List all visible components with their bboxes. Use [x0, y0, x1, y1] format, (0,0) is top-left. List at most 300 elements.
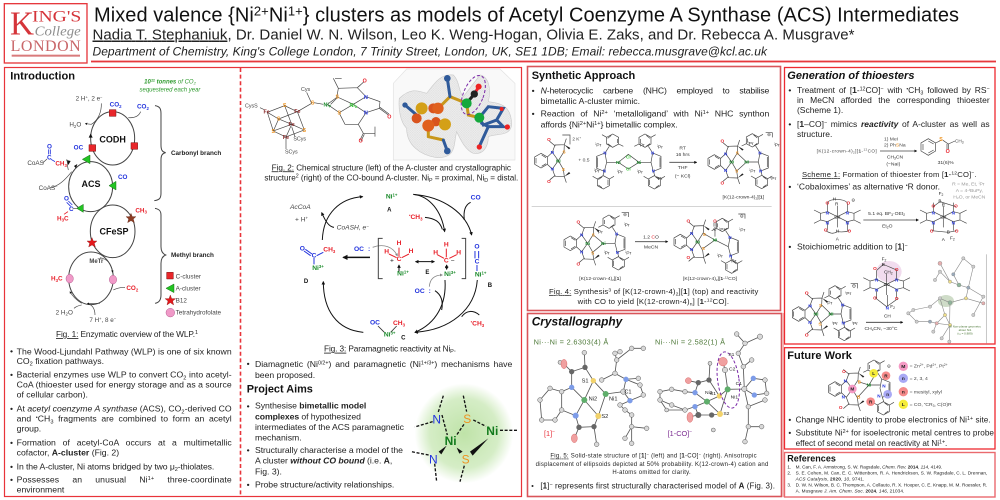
text block: introduction bullets: environment: [17, 485, 65, 495]
figure 3: paramagnetic reactivity cycle: +: [306, 216, 309, 221]
title: Mixed valence {Ni: [94, 5, 254, 27]
figure 1: enzymatic overview of the WLP: tonnes: [155, 79, 177, 85]
figure 3: paramagnetic reactivity cycle: CH: [472, 321, 482, 328]
figure 3: paramagnetic reactivity cycle: H: [433, 249, 438, 256]
text block: thioester bullets: with: [883, 85, 906, 95]
figure 1: enzymatic overview of the WLP: CFeSP: [100, 226, 128, 236]
text block: introduction bullets: [10, 346, 232, 495]
figure 4: synthesis scheme of complex 1: O: [577, 220, 581, 225]
text block: future work bullets: •: [788, 429, 791, 438]
caption: figure 4: 12: [707, 297, 713, 303]
figure: stoichiometric addition with crystal structure: N: [841, 302, 845, 308]
scheme: cobaloxime BF2 conversion: Et: [882, 224, 887, 230]
figure 2: A-cluster chemical structure: SCys: [285, 149, 298, 155]
text block: thioester bullets: •: [788, 85, 791, 95]
figure: stoichiometric addition with crystal structure: O: [873, 295, 877, 300]
caption: scheme 1: .: [975, 170, 977, 179]
text block: reference list: 3.: [787, 483, 791, 488]
caption: figure 2: = distal.: [488, 173, 518, 182]
figure: future work ligand design: Ni: [867, 383, 871, 388]
scheme: cobaloxime BF2 conversion: N: [952, 220, 956, 225]
panel: references: [784, 452, 995, 497]
figure: future work ligand design: L: [872, 371, 875, 376]
figure 5: solid-state crystal structures: Ni···Ni = 2.6303(4) Å: [534, 338, 608, 347]
heading: Crystallography: Crystallography: [532, 314, 624, 328]
title: 1+: [288, 4, 303, 19]
scheme: cobaloxime BF2 conversion: O: [932, 204, 936, 209]
figure: future work ligand design: [829, 360, 952, 415]
figure 1: enzymatic overview of the WLP: C: [64, 215, 69, 222]
scheme 1: thioester formation: 1) MeI: [884, 136, 898, 142]
scheme: cobaloxime BF2 conversion: O: [930, 228, 934, 233]
figure 3: paramagnetic reactivity cycle: C: [475, 258, 480, 265]
figure 4: synthesis scheme of complex 1: ⁱPr: [770, 175, 777, 182]
text block: thioester bullets: 3: [920, 91, 923, 97]
figure 5: solid-state crystal structures: S2: [601, 414, 608, 420]
text block: project aims bullets: Structurally characterise a model of the: [255, 445, 403, 455]
figure 4: synthesis scheme of complex 1: 16 hrs: [676, 152, 690, 158]
figure: stoichiometric addition with crystal structure: ⊖: [852, 284, 856, 290]
scheme 1: thioester formation: 31(6)%: [938, 160, 954, 166]
figure 2: A-cluster chemical structure: N: [364, 95, 368, 101]
text block: introduction bullets: •: [10, 475, 13, 485]
figure 1: enzymatic overview of the WLP: −: [114, 316, 117, 321]
figure 3: paramagnetic reactivity cycle: 3: [482, 323, 485, 328]
figure: future work ligand design: B: [858, 380, 862, 385]
scheme 1: thioester formation: 1-: [859, 148, 863, 153]
text block: mechanism note: Diamagnetic (Ni: [255, 359, 318, 369]
scheme 1: thioester formation: CH: [955, 139, 962, 144]
text block: introduction bullets: of cellular carbon).: [17, 390, 88, 400]
caption: scheme 1: 12: [951, 170, 957, 176]
figure 3: paramagnetic reactivity cycle: OC: [370, 319, 380, 326]
text block: introduction bullets: and: [17, 414, 31, 424]
figure: future work ligand design: R: [884, 373, 888, 378]
text block: introduction bullets: 2: [30, 362, 33, 368]
figure 5: solid-state crystal structures: Ni2: [589, 396, 597, 402]
panel: synthetic approach: [528, 66, 780, 310]
figure 4: synthesis scheme of complex 1: 2: [612, 278, 614, 282]
scheme: cobaloxime BF2 conversion: 3: [891, 213, 893, 217]
scheme: cobaloxime BF2 conversion: O: [824, 228, 828, 233]
text block: crystallography bullet: A (Fig. 3).: [739, 482, 775, 491]
text block: introduction bullets: -derived CO: [185, 404, 232, 414]
figure: future work ligand design: O: [839, 405, 843, 410]
text block: thioester bullets: [788, 85, 990, 139]
figure 3: paramagnetic reactivity cycle: Ni: [384, 332, 391, 339]
text block: thioester bullets: CH: [908, 85, 920, 95]
figure 1: enzymatic overview of the WLP: O: [76, 122, 81, 129]
figure 3: paramagnetic reactivity cycle: + H: [295, 217, 306, 224]
text block: introduction bullets: group.: [17, 424, 41, 434]
figure 4: synthesis scheme of complex 1: ⁱPr: [595, 141, 602, 148]
scheme: cobaloxime BF2 conversion: F: [950, 235, 953, 240]
figure 1: enzymatic overview of the WLP: CH: [135, 207, 144, 214]
figure 2: A-cluster chemical structure: O: [387, 114, 391, 120]
figure: future work ligand design: L: [902, 402, 905, 408]
figure: stoichiometric addition with crystal structure: N: [895, 288, 899, 293]
caption: figure 5: −: [647, 452, 650, 457]
scheme: cobaloxime BF2 conversion: N: [826, 220, 830, 225]
header: King's College London logo: LONDON: [11, 38, 81, 55]
figure 5: solid-state crystal structures: [534, 332, 769, 447]
figure 3: paramagnetic reactivity cycle: CoASH, e: [337, 224, 366, 231]
figure: stoichiometric addition with crystal structure: O: [895, 267, 899, 272]
caption: scheme 1: CO]: [957, 170, 971, 179]
figure: future work ligand design: ⊖: [887, 364, 891, 369]
figure: future work ligand design: n: [886, 392, 889, 397]
figure: future work ligand design: R: [869, 399, 873, 404]
figure: future work ligand design: , C(O)R: [934, 402, 952, 408]
text block: introduction bullets: CO: [17, 356, 30, 366]
figure 4: synthesis scheme of complex 1: O: [721, 138, 725, 143]
figure 3: paramagnetic reactivity cycle: OC:: [415, 288, 431, 295]
caption: figure 5: displacement of ellipsoids depicted at 50% probability. K(12-crown-4) cation and: [536, 462, 768, 468]
scheme 1: thioester formation: [K(12-crown-4): [817, 148, 853, 153]
figure 1: enzymatic overview of the WLP: 2: [74, 124, 77, 129]
figure 3: paramagnetic reactivity cycle: 3+: [319, 264, 324, 269]
heading: References: References: [787, 454, 836, 464]
figure 4: synthesis scheme of complex 1: N: [759, 169, 762, 174]
figure: stoichiometric addition with crystal structure: ⁱPr: [845, 290, 852, 297]
figure: stoichiometric addition with crystal structure: O: [873, 266, 877, 271]
text block: cobaloxime bullet: •: [788, 182, 791, 192]
figure 4: synthesis scheme of complex 1: N: [551, 167, 555, 172]
figure 2: A-cluster chemical structure: Ni: [349, 103, 355, 109]
figure 4: synthesis scheme of complex 1: +: [579, 136, 581, 140]
figure 3: paramagnetic reactivity cycle: 3: [403, 322, 406, 327]
figure: future work ligand design: = Zn: [910, 364, 920, 370]
figure 1: enzymatic overview of the WLP: 11: [151, 77, 155, 82]
figure 5: solid-state crystal structures: Ni2: [705, 390, 713, 396]
caption: figure 4: ] [: [693, 297, 700, 306]
figure 1: enzymatic overview of the WLP: 2: [66, 312, 69, 317]
text block: synthetic approach bullets: [532, 86, 769, 130]
text block: future work bullets: [788, 416, 994, 448]
figure 4: synthesis scheme of complex 1: O: [547, 179, 551, 184]
figure 5: solid-state crystal structures: [1-CO]: [668, 429, 689, 438]
text block: introduction bullets: 2: [175, 467, 178, 473]
figure: stoichiometric addition with crystal structure: SI Non-planar geometry: [949, 325, 981, 329]
figure 3: paramagnetic reactivity cycle: •: [471, 320, 473, 325]
figure 5: solid-state crystal structures: Ni1: [731, 394, 738, 400]
scheme: cobaloxime BF2 conversion: B: [938, 198, 942, 203]
figure 3: paramagnetic reactivity cycle: Ni: [397, 270, 404, 277]
figure 4: synthesis scheme of complex 1: ⁱPr: [639, 141, 645, 148]
figure 2: A-cluster chemical structure: S: [311, 100, 315, 106]
figure 1: enzymatic overview of the WLP: CO: [126, 285, 136, 292]
figure: future work ligand design: N: [877, 393, 881, 398]
scheme: cobaloxime BF2 conversion: O: [955, 228, 959, 233]
caption: figure 5: (left) and [: [649, 454, 681, 460]
figure 1: enzymatic overview of the WLP: CO: [118, 174, 128, 181]
figure 3: paramagnetic reactivity cycle: H: [384, 248, 389, 255]
affiliation: Department of Chemistry, King's College London, 7 Trinity Street, London, UK, SE1 1DB; Email: rebecca.musgrave@kcl.ac.uk: [92, 44, 768, 58]
figure 1: enzymatic overview of the WLP: Tetrahydrofolate: [176, 309, 222, 316]
panel: future work: [784, 348, 995, 449]
figure 1: enzymatic overview of the WLP: +: [99, 316, 102, 321]
figure 3: paramagnetic reactivity cycle: O: [474, 243, 480, 250]
figure 1: enzymatic overview of the WLP: 3: [56, 278, 59, 283]
figure: stoichiometric addition with crystal structure: Co: [884, 282, 890, 287]
figure 3: paramagnetic reactivity cycle: 3+: [451, 270, 456, 275]
text block: introduction bullets: 3: [50, 419, 53, 425]
figure 4: synthesis scheme of complex 1: ⁱPr: [749, 167, 756, 174]
figure 1: enzymatic overview of the WLP: 2: [119, 104, 122, 109]
figure: stoichiometric addition with crystal structure: CH: [884, 269, 891, 274]
scheme 1: thioester formation: 2: [853, 150, 855, 154]
figure 3: paramagnetic reactivity cycle: E: [425, 270, 429, 276]
text block: stoichiometric addition bullet: •: [788, 242, 791, 252]
figure 4: synthesis scheme of complex 1: N: [615, 232, 618, 237]
text block: synthetic approach bullets: Ni: [586, 120, 594, 130]
text block: project aims bullets: A cluster without CO bound (i.e. A,: [255, 456, 392, 466]
caption: figure 2: Fig. 2: Chemical structure (left) of the A-cluster and crystallographic: [272, 163, 511, 172]
text block: introduction bullets: fixation pathways.: [33, 356, 104, 366]
scheme: cobaloxime BF2 conversion: Co: [940, 214, 947, 219]
figure 5: solid-state crystal structures: C2: [729, 367, 736, 373]
caption: figure 4: of [K(12-crown-4): [611, 287, 676, 296]
text block: future work bullets: •: [788, 416, 791, 425]
figure: stoichiometric addition with crystal structure: N: [808, 303, 812, 309]
scheme: cobaloxime BF2 conversion: H₂O, or MeCN: [953, 194, 986, 200]
figure 1: enzymatic overview of the WLP: +: [86, 94, 89, 99]
text block: crystallography bullet: −: [549, 482, 553, 488]
figure 4: synthesis scheme of complex 1: Ni: [729, 160, 734, 165]
figure 4: synthesis scheme of complex 1: S: [562, 149, 566, 154]
figure 1: enzymatic overview of the WLP: C: [47, 155, 52, 162]
caption: figure 5: H-atoms omitted for clarity.: [612, 470, 691, 476]
text block: future work bullets: 2+: [843, 429, 849, 435]
figure 2: A-cluster chemical structure: S: [277, 116, 281, 122]
figure 4: synthesis scheme of complex 1: CO]: [728, 276, 738, 282]
figure 3: paramagnetic reactivity cycle: H: [444, 241, 449, 248]
figure 4: synthesis scheme of complex 1: O: [721, 180, 725, 185]
text block: project aims bullets: Synthesise bimetallic model: [255, 401, 366, 411]
figure 1: enzymatic overview of the WLP: C: [58, 276, 63, 283]
figure: stoichiometric addition with crystal structure: Ni: [828, 312, 834, 318]
figure 1: enzymatic overview of the WLP: 2: [146, 106, 149, 111]
scheme: cobaloxime BF2 conversion: N: [952, 210, 956, 215]
scheme: cobaloxime BF2 conversion: N: [846, 210, 850, 215]
figure: future work ligand design: , Pt: [936, 364, 944, 370]
figure 4: synthesis scheme of complex 1: 12: [725, 276, 728, 280]
text block: project aims bullets: •: [247, 479, 250, 489]
figure: future work ligand design: = mesityl, xylyl: [910, 389, 942, 395]
figure 2: A-cluster chemical structure: S: [336, 94, 340, 100]
text block: project aims bullets: •: [247, 401, 250, 411]
figure 4: synthesis scheme of complex 1: ⁱPr: [657, 143, 663, 150]
figure: future work ligand design: n: [902, 389, 905, 395]
scheme: cobaloxime BF2 conversion: ⊖: [851, 198, 855, 203]
figure 4: synthesis scheme of complex 1: N: [690, 247, 694, 252]
text block: introduction bullets: Formation of acetyl-CoA occurs at a multimetallic: [17, 438, 232, 448]
figure 1: enzymatic overview of the WLP: 2: [193, 81, 197, 86]
figure 3: paramagnetic reactivity cycle: CH: [323, 247, 333, 254]
scheme: cobaloxime BF2 conversion: 2: [953, 237, 955, 241]
figure 2: A-cluster chemical structure: S: [272, 129, 276, 135]
figure: future work ligand design: = CO,: [910, 402, 923, 408]
caption: figure 2: 2: [296, 174, 299, 180]
illustration: bimetallic Ni2S2 model core: N: [429, 453, 438, 467]
figure 1: enzymatic overview of the WLP: sequestered each year: [140, 88, 201, 94]
figure 3: paramagnetic reactivity cycle: 3: [333, 249, 336, 254]
text block: cobaloxime bullet: ‘Cobaloximes’ as alternative: [797, 182, 903, 192]
figure 1: enzymatic overview of the WLP: CODH: [99, 134, 126, 144]
figure 4: synthesis scheme of complex 1: S: [591, 250, 594, 255]
figure: stoichiometric addition with crystal structure: 3: [872, 328, 874, 332]
figure: stoichiometric addition with crystal structure: N: [886, 305, 890, 310]
authors: Nadia T. Stephaniuk, Dr. Daniel W. N. Wilson, Leo K. Weng-Hogan, Olivia E. Zaks, and Dr. Rebecca A. Musgrave*: [92, 26, 855, 44]
figure 3: paramagnetic reactivity cycle: Ni: [475, 271, 482, 278]
figure 4: synthesis scheme of complex 1: Ni: [744, 160, 749, 165]
text block: future work bullets: Change NHC identity to probe electronics of Ni: [796, 416, 967, 425]
figure 1: enzymatic overview of the WLP: MeTr: [89, 259, 104, 265]
text block: reference list: D. W. N. Wilson, B. C. Thompson, A. Collauto, R. X. Hooper, C. E. Knapp, M. M. Roessler, R.: [796, 483, 987, 488]
figure 1: enzymatic overview of the WLP: Methyl branch: [171, 252, 214, 259]
figure: future work ligand design: N: [844, 378, 848, 383]
figure 4: synthesis scheme of complex 1: [532, 132, 780, 282]
text block: project aims bullets: [247, 401, 405, 489]
scheme: cobaloxime BF2 conversion: A = 4-ᵗBuPy,: [956, 188, 983, 194]
figure 3: paramagnetic reactivity cycle: Ni: [386, 193, 393, 200]
figure 4: synthesis scheme of complex 1: N: [616, 250, 619, 255]
figure 4: synthesis scheme of complex 1: N: [603, 168, 606, 173]
figure 3: paramagnetic reactivity cycle: A: [387, 207, 392, 213]
figure: future work ligand design: 2+: [932, 363, 936, 367]
figure 2: CO-bound A-cluster crystal structure: [393, 69, 515, 160]
text block: introduction bullets: •: [10, 438, 13, 448]
scheme: cobaloxime BF2 conversion: B: [947, 230, 950, 235]
figure 1: enzymatic overview of the WLP: 3: [62, 218, 65, 223]
caption: figure 5: 1-CO]: [681, 454, 698, 460]
figure 2: A-cluster chemical structure: D: [355, 105, 358, 109]
illustration: bimetallic Ni2S2 model core: [411, 383, 518, 483]
figure: future work ligand design: •: [924, 401, 926, 405]
figure 3: paramagnetic reactivity cycle: [289, 192, 493, 341]
figure 1: enzymatic overview of the WLP: CH: [55, 161, 64, 168]
figure 4: synthesis scheme of complex 1: ⁱPr: [730, 257, 737, 264]
caption: figure 4: 2: [676, 292, 679, 298]
caption: figure 2: P: [429, 178, 433, 184]
figure 3: paramagnetic reactivity cycle: 1+: [393, 192, 398, 197]
figure: stoichiometric addition with crystal structure: 2: [893, 306, 895, 310]
text block: introduction bullets: into acetyl-: [187, 370, 232, 380]
text block: reference list: S. E. Cohen, M. Can, E. C. Wittenborn, R. A. Hendrickson, S. W. Ragsdale, C. L. Drennan,: [796, 471, 987, 476]
figure 3: paramagnetic reactivity cycle: Ni: [312, 265, 319, 272]
figure 3: paramagnetic reactivity cycle: C: [312, 253, 317, 260]
figure 1: enzymatic overview of the WLP: 3: [144, 210, 147, 215]
figure 1: enzymatic overview of the WLP: B12: [176, 297, 187, 304]
figure: future work ligand design: CR: [925, 402, 933, 408]
figure 4: synthesis scheme of complex 1: ⊖: [623, 212, 627, 217]
figure: stoichiometric addition with crystal structure: ⁱPr: [852, 320, 858, 327]
caption: figure 3: Fig. 3: Paramagnetic reactivity at Ni: [324, 344, 450, 354]
figure 1: enzymatic overview of the WLP: [27, 77, 222, 324]
text block: mechanism note: been proposed.: [255, 370, 315, 380]
figure 1: enzymatic overview of the WLP: 7 H: [89, 317, 99, 324]
caption: figure 2: [264, 163, 518, 184]
figure: stoichiometric addition with crystal structure: O: [805, 332, 809, 338]
text block: introduction bullets: •: [10, 461, 13, 471]
scheme: cobaloxime BF2 conversion: [814, 181, 986, 242]
text block: synthetic approach bullets: 1+: [594, 121, 601, 127]
figure 2: A-cluster chemical structure: Fe: [264, 110, 270, 116]
figure 2: A-cluster chemical structure: Ni: [324, 102, 329, 108]
figure 3: paramagnetic reactivity cycle: Ni: [444, 271, 451, 278]
figure 4: synthesis scheme of complex 1: Ni: [601, 241, 606, 246]
figure 4: synthesis scheme of complex 1: ⁱPr: [717, 253, 723, 260]
figure: stoichiometric addition with crystal structure: F: [890, 304, 893, 309]
figure 2: A-cluster chemical structure: O: [359, 139, 363, 145]
caption: figure 5: [536, 452, 768, 476]
text block: synthetic approach bullets: Reaction of Ni: [541, 109, 601, 119]
figure 1: enzymatic overview of the WLP: 2 H: [76, 95, 86, 102]
figure 4: synthesis scheme of complex 1: ⊖: [740, 214, 743, 219]
caption: figure 4: 1-: [700, 297, 707, 306]
figure 3: paramagnetic reactivity cycle: O: [300, 246, 305, 253]
text block: future work bullets: 1+: [939, 439, 945, 445]
text block: thioester bullets: reactivity of A-cluster as well as: [861, 119, 990, 129]
header: King's College London logo: College: [35, 24, 81, 39]
text block: future work bullets: effect of second metal on reactivity at Ni: [796, 439, 939, 448]
text block: mechanism note: •: [247, 359, 250, 369]
caption: figure 5: (right). Anisotropic: [701, 454, 757, 460]
text block: synthetic approach bullets: affords {Ni: [541, 120, 580, 130]
text block: introduction bullets: -thiolates.: [178, 461, 214, 471]
heading: Synthetic Approach: Synthetic Approach: [532, 70, 635, 82]
figure 3: paramagnetic reactivity cycle: D: [304, 279, 309, 285]
scheme 1: thioester formation: ][: [855, 148, 859, 153]
panel: crystallography: [528, 314, 782, 496]
figure 3: paramagnetic reactivity cycle: 3+: [391, 331, 396, 336]
figure 4: synthesis scheme of complex 1: ⁱPr: [597, 228, 603, 235]
figure 4: synthesis scheme of complex 1: 1]: [760, 195, 764, 201]
figure 5: solid-state crystal structures: −: [689, 430, 692, 436]
figure 4: synthesis scheme of complex 1: C: [713, 226, 717, 231]
figure 4: synthesis scheme of complex 1: S: [736, 151, 739, 156]
text block: introduction bullets: Bacterial enzymes use WLP to convert CO: [17, 370, 183, 380]
figure 5: solid-state crystal structures: Ni···Ni = 2.582(1) Å: [655, 338, 725, 347]
scheme: cobaloxime BF2 conversion: O: [826, 200, 830, 205]
figure 4: synthesis scheme of complex 1: N: [651, 150, 654, 155]
figure 3: paramagnetic reactivity cycle: C: [444, 258, 449, 265]
figure 4: synthesis scheme of complex 1: 2: [755, 197, 757, 201]
figure: future work ligand design: 2+: [920, 363, 924, 367]
text block: synthetic approach bullets: N-heterocyclic carbene (NHC) employed to stabilise: [541, 86, 769, 96]
figure: stoichiometric addition with crystal structure: ⁱPr: [832, 320, 838, 327]
text block: future work bullets: .: [945, 439, 947, 448]
figure 4: synthesis scheme of complex 1: 2: [716, 278, 718, 282]
figure 1: enzymatic overview of the WLP: , 8 e: [102, 317, 114, 324]
illustration: bimetallic Ni2S2 model core: Ni: [486, 424, 498, 438]
illustration: bimetallic Ni2S2 model core: S: [463, 412, 471, 426]
figure 3: paramagnetic reactivity cycle: CH: [410, 214, 420, 221]
caption: figure 4: 1] (top) and reactivity: [683, 287, 758, 296]
text block: reference list: 2.: [787, 471, 791, 476]
text block: project aims bullets: mechanism.: [255, 432, 302, 442]
figure 1: enzymatic overview of the WLP: A-cluster: [176, 286, 201, 293]
caption: scheme 1: Scheme 1: Formation of thioester from [1-: [802, 170, 951, 179]
figure 3: paramagnetic reactivity cycle: 3: [420, 216, 423, 221]
scheme 1: thioester formation: S: [939, 137, 943, 143]
caption: figure 2: D: [484, 178, 488, 184]
text block: synthetic approach bullets: } bimetallic complex.: [600, 120, 678, 130]
caption: scheme 1: −: [971, 170, 974, 176]
text block: synthetic approach bullets: •: [532, 86, 535, 96]
figure 4: synthesis scheme of complex 1: [K(12-crown-4): [683, 276, 716, 282]
text block: synthetic approach bullets: ‘metalloligand’ with Ni: [608, 109, 703, 119]
